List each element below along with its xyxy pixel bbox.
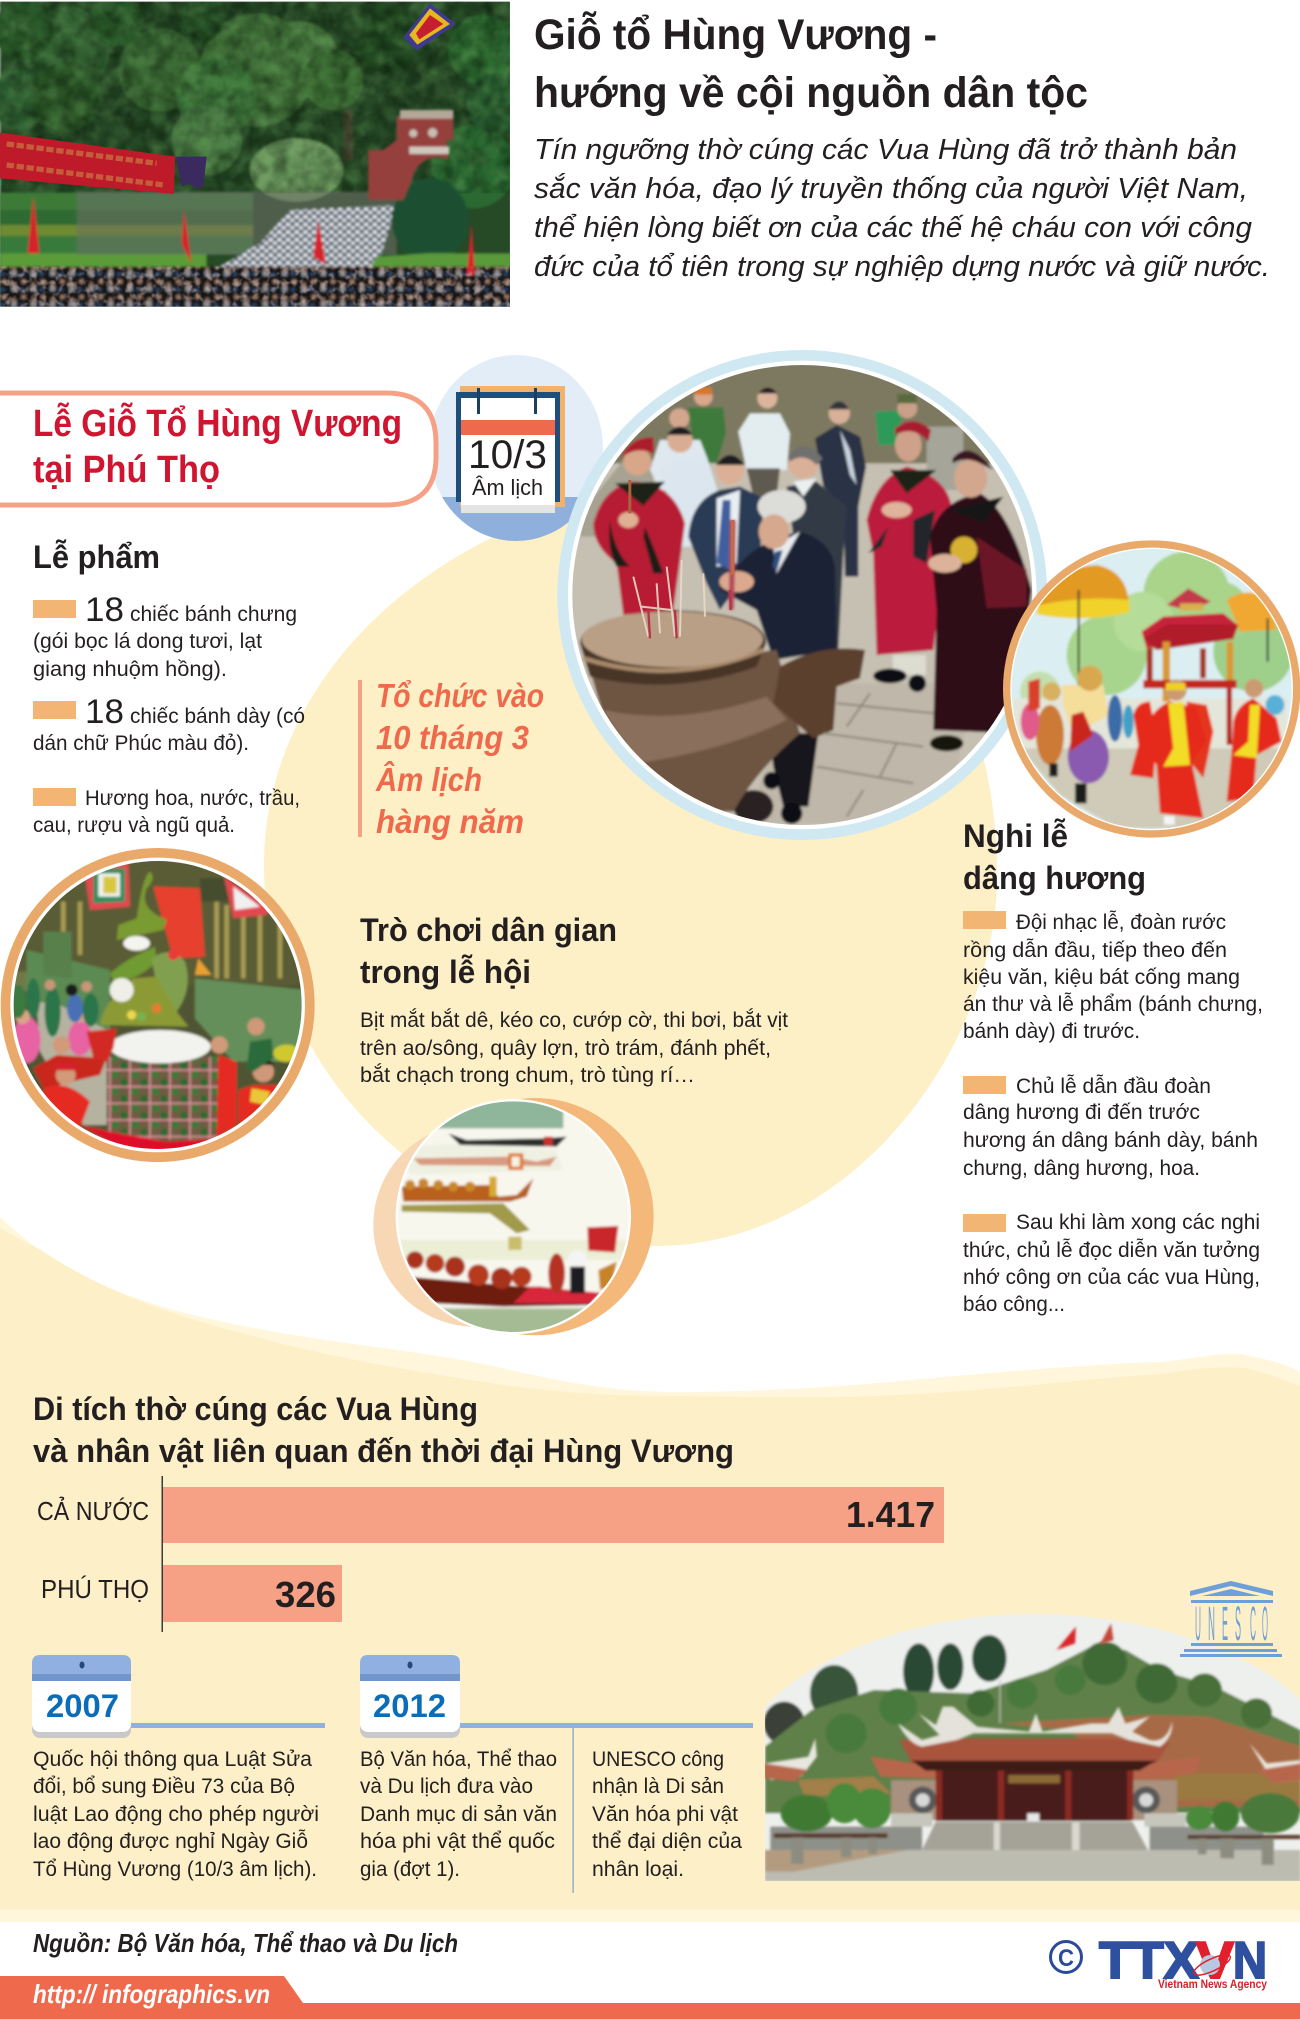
bar: Phu Tho	[41, 1565, 342, 1622]
panel: incense ceremony	[963, 818, 1263, 1316]
offering item 1: chiếc bánh chưng	[130, 602, 297, 626]
intro text: thể hiện lòng biết ơn của các thế hệ cháu con với công	[534, 212, 1252, 244]
people	[13, 1017, 41, 1063]
icon: UNESCO logo: C	[1250, 1598, 1256, 1651]
dragon	[117, 872, 167, 940]
boat 1	[448, 1133, 567, 1147]
2012 text: UNESCO: nhân loại.	[592, 1857, 684, 1881]
heading: folk games: trong lễ hội	[360, 954, 531, 990]
right red robe	[867, 467, 952, 655]
flags	[1057, 1627, 1076, 1650]
title: hướng về cội nguồn dân tộc	[534, 69, 1088, 117]
ceremony step 1: Đội nhạc lễ, đoàn rước	[1016, 909, 1226, 934]
section heading: highlight date: 10 tháng 3	[376, 719, 529, 756]
header photo: crowd at the Hung temple	[0, 0, 527, 310]
icon: UNESCO logo: N	[1208, 1598, 1215, 1651]
panel: timeline	[32, 1655, 753, 1893]
footer bar with URL	[0, 1976, 1300, 2019]
calendar badge 2012: 2012	[373, 1688, 446, 1724]
right dark robe	[930, 493, 1032, 733]
rice and banh chung stack	[107, 1057, 220, 1140]
ceremony step 1: rồng dẫn đầu, tiếp theo đến	[963, 937, 1227, 962]
calendar icon: 10/3 lunar date	[429, 355, 603, 541]
reflections	[402, 1203, 530, 1233]
offering item 2	[33, 693, 305, 755]
main roof	[900, 1738, 1170, 1767]
heading: relics: và nhân vật liên quan đến thời đại Hùng Vương	[33, 1433, 734, 1469]
flags	[85, 863, 130, 910]
calendar icon: 10/3 lunar date: 10/3	[468, 433, 547, 477]
heading: offerings: Lễ phẩm	[33, 539, 160, 575]
2012 text: UNESCO: Văn hóa phi vật	[592, 1802, 738, 1826]
logo: TTXVN: N	[1233, 1932, 1267, 1990]
calendar badge 2012	[360, 1655, 460, 1738]
flags	[28, 197, 39, 253]
ceremony step 2: chưng, dâng hương, hoa.	[963, 1156, 1200, 1180]
left red robe	[593, 482, 685, 615]
bar chart	[37, 1476, 944, 1632]
2012 text: UNESCO: UNESCO công	[592, 1747, 724, 1771]
right people	[217, 1055, 237, 1138]
section banner: Le Gio To Hung Vuong: Lễ Giỗ Tổ Hùng Vương	[33, 401, 402, 445]
bar: Phu Tho: 326	[275, 1574, 336, 1615]
title	[534, 10, 1088, 117]
timeline: 2007	[32, 1655, 325, 1881]
folk games text: bắt chạch trong chum, trò tùng rí…	[360, 1062, 695, 1087]
incense	[633, 560, 705, 637]
court	[765, 1850, 1300, 1882]
ceremony step 1: kiệu văn, kiệu bát cống mang	[963, 965, 1240, 989]
ceremony step 3: báo công...	[963, 1292, 1065, 1316]
circular photo: offering tray with dragon	[0, 845, 320, 1165]
ceremony step 2	[963, 1073, 1258, 1180]
panel: offerings	[33, 539, 305, 837]
boat 3	[402, 1178, 533, 1202]
red men	[1130, 702, 1157, 778]
wall	[891, 1780, 1177, 1820]
calendar icon: 10/3 lunar date: Âm lịch	[472, 475, 543, 500]
folk games text: trên ao/sông, quây lợn, trò trám, đánh phết,	[360, 1036, 771, 1060]
offering item 1: giang nhuộm hồng).	[33, 657, 227, 681]
circular photo: dragon boat race	[370, 1090, 660, 1343]
logo: TTXVN	[1050, 1932, 1268, 1991]
temple photo	[760, 1600, 1300, 1890]
big yellow circle background	[264, 490, 997, 1246]
offering item 1: 18	[85, 591, 124, 629]
hill	[765, 1647, 1300, 1813]
ceremony step 2: hương án dâng bánh dày, bánh	[963, 1128, 1258, 1152]
bottom crowd	[0, 267, 512, 310]
second suit	[787, 482, 847, 650]
circular photo: palanquin procession	[1000, 535, 1300, 845]
icon: UNESCO logo: S	[1235, 1598, 1241, 1651]
intro text: đức của tổ tiên trong sự nghiệp dựng nước và giữ nước.	[534, 251, 1270, 283]
palm	[392, 178, 468, 262]
offering item 2: dán chữ Phúc màu đỏ).	[33, 731, 249, 755]
crowd going uphill	[213, 205, 397, 270]
2007 text: Quốc hội thông qua Luật Sửa	[33, 1747, 312, 1771]
logo: TTXVN: C	[1058, 1945, 1074, 1972]
trees	[903, 1643, 934, 1700]
pagoda	[1167, 588, 1211, 608]
2012 text: UNESCO: thể đại diện của	[592, 1829, 742, 1853]
banner	[0, 133, 175, 194]
ceremony step 3: nhớ công ơn của các vua Hùng,	[963, 1265, 1260, 1289]
2007 text: luật Lao động cho phép người	[33, 1802, 319, 1826]
2012 text: ministry: Danh mục di sản văn	[360, 1802, 557, 1826]
bar: whole country: CẢ NƯỚC	[37, 1496, 149, 1526]
2007 text	[33, 1747, 319, 1881]
gate	[368, 117, 453, 200]
title: Giỗ tổ Hùng Vương -	[534, 10, 937, 59]
boat 2	[413, 1157, 557, 1166]
logo: TTXVN: TTX	[1099, 1932, 1199, 1990]
panel: folk games	[360, 912, 788, 1087]
footer white band	[0, 1922, 1300, 2019]
icon: UNESCO logo: O	[1262, 1598, 1268, 1651]
paving lines	[817, 693, 933, 817]
side roofs	[765, 1738, 817, 1780]
section banner: Le Gio To Hung Vuong: tại Phú Thọ	[33, 449, 220, 491]
boat 4	[407, 1277, 600, 1307]
2007 text: lao động được nghỉ Ngày Giỗ	[33, 1828, 308, 1853]
bottom yellow wave background	[0, 1217, 1300, 1922]
section heading: highlight date: Âm lịch	[375, 761, 482, 798]
bar: whole country	[37, 1487, 944, 1543]
2012 text: ministry: gia (đợt 1).	[360, 1857, 460, 1881]
folk games text: Bịt mắt bắt dê, kéo co, cướp cờ, thi bơi, bắt vịt	[360, 1007, 788, 1032]
heading: folk games	[360, 912, 617, 990]
timeline: 2012	[360, 1655, 753, 1893]
offering item 2: 18	[85, 693, 124, 731]
ceremony step 3	[963, 1210, 1260, 1316]
ceremony step 2: dâng hương đi đến trước	[963, 1100, 1200, 1124]
ceremony step 1	[963, 909, 1263, 1043]
heading: folk games: Trò chơi dân gian	[360, 912, 617, 948]
section banner: Le Gio To Hung Vuong	[0, 393, 436, 505]
2012 text: ministry: Bộ Văn hóa, Thể thao	[360, 1747, 557, 1771]
2012 text: ministry: hóa phi vật thể quốc	[360, 1829, 555, 1853]
2012 text: UNESCO: nhận là Di sản	[592, 1774, 724, 1798]
calendar badge 2007	[32, 1655, 131, 1738]
ceremony step 3: thức, chủ lễ đọc diễn văn tưởng	[963, 1237, 1260, 1262]
intro text	[534, 134, 1270, 283]
2012 text: ministry: và Du lịch đưa vào	[360, 1774, 533, 1798]
foliage texture	[0, 0, 512, 193]
intro text: sắc văn hóa, đạo lý truyền thống của người Việt Nam,	[534, 172, 1248, 205]
heading: relics	[33, 1391, 734, 1469]
section heading: highlight date	[358, 677, 544, 840]
2012 text: ministry	[360, 1747, 557, 1881]
icon: UNESCO logo: E	[1222, 1598, 1228, 1651]
umbrella right	[1227, 592, 1277, 632]
hedges	[0, 193, 253, 211]
footer bar with URL: http:// infographics.vn	[33, 1979, 270, 2009]
center suit	[688, 487, 764, 610]
urn	[733, 790, 773, 823]
main circular photo: incense offering	[557, 350, 1050, 840]
left costumes	[1036, 705, 1064, 765]
background people	[875, 410, 903, 445]
offering item 3: Hương hoa, nước, trầu,	[85, 786, 300, 810]
calendar badge 2007: 2007	[46, 1688, 119, 1724]
ceremony step 2: Chủ lễ dẫn đầu đoàn	[1016, 1073, 1211, 1098]
offering item 1	[33, 591, 297, 681]
fruits	[100, 977, 188, 1027]
bar: whole country: 1.417	[846, 1494, 935, 1535]
heading: incense ceremony	[963, 818, 1146, 896]
icon: UNESCO logo	[1180, 1581, 1282, 1657]
source note: Nguồn: Bộ Văn hóa, Thể thao và Du lịch	[33, 1928, 458, 1958]
main figure	[720, 532, 837, 660]
heading: incense ceremony: dâng hương	[963, 860, 1146, 896]
bonsai	[781, 1795, 832, 1832]
ceremony step 1: án thư và lễ phẩm (bánh chưng,	[963, 991, 1263, 1016]
icon: UNESCO logo: U	[1195, 1598, 1201, 1651]
umbrella left	[1038, 564, 1130, 608]
logo: TTXVN: V	[1196, 1932, 1234, 1990]
intro text: Tín ngưỡng thờ cúng các Vua Hùng đã trở thành bản	[534, 134, 1237, 166]
ceremony step 3: Sau khi làm xong các nghi	[1016, 1210, 1260, 1234]
folk games text	[360, 1007, 788, 1087]
bar: Phu Tho: PHÚ THỌ	[41, 1574, 149, 1604]
offering item 1: (gói bọc lá dong tươi, lạt	[33, 629, 262, 653]
offering item 2: chiếc bánh dày (có	[130, 704, 305, 728]
offering item 3	[33, 786, 300, 837]
heading: incense ceremony: Nghi lễ	[963, 818, 1068, 854]
2007 text: Tổ Hùng Vương (10/3 âm lịch).	[33, 1857, 317, 1881]
heading: relics: Di tích thờ cúng các Vua Hùng	[33, 1391, 478, 1427]
panel: relics statistics	[33, 1391, 944, 1632]
steps	[922, 1822, 1148, 1850]
logo: TTXVN: Vietnam News Agency	[1158, 1979, 1268, 1991]
offering item 3: cau, rượu và ngũ quả.	[33, 813, 235, 837]
2012 text: UNESCO	[592, 1747, 742, 1881]
section heading: highlight date: hàng năm	[376, 803, 524, 840]
top flag	[403, 3, 456, 51]
ceremony step 1: bánh dày) đi trước.	[963, 1019, 1140, 1043]
2007 text: đổi, bổ sung Điều 73 của Bộ	[33, 1774, 295, 1798]
section heading: highlight date: Tổ chức vào	[376, 677, 544, 714]
